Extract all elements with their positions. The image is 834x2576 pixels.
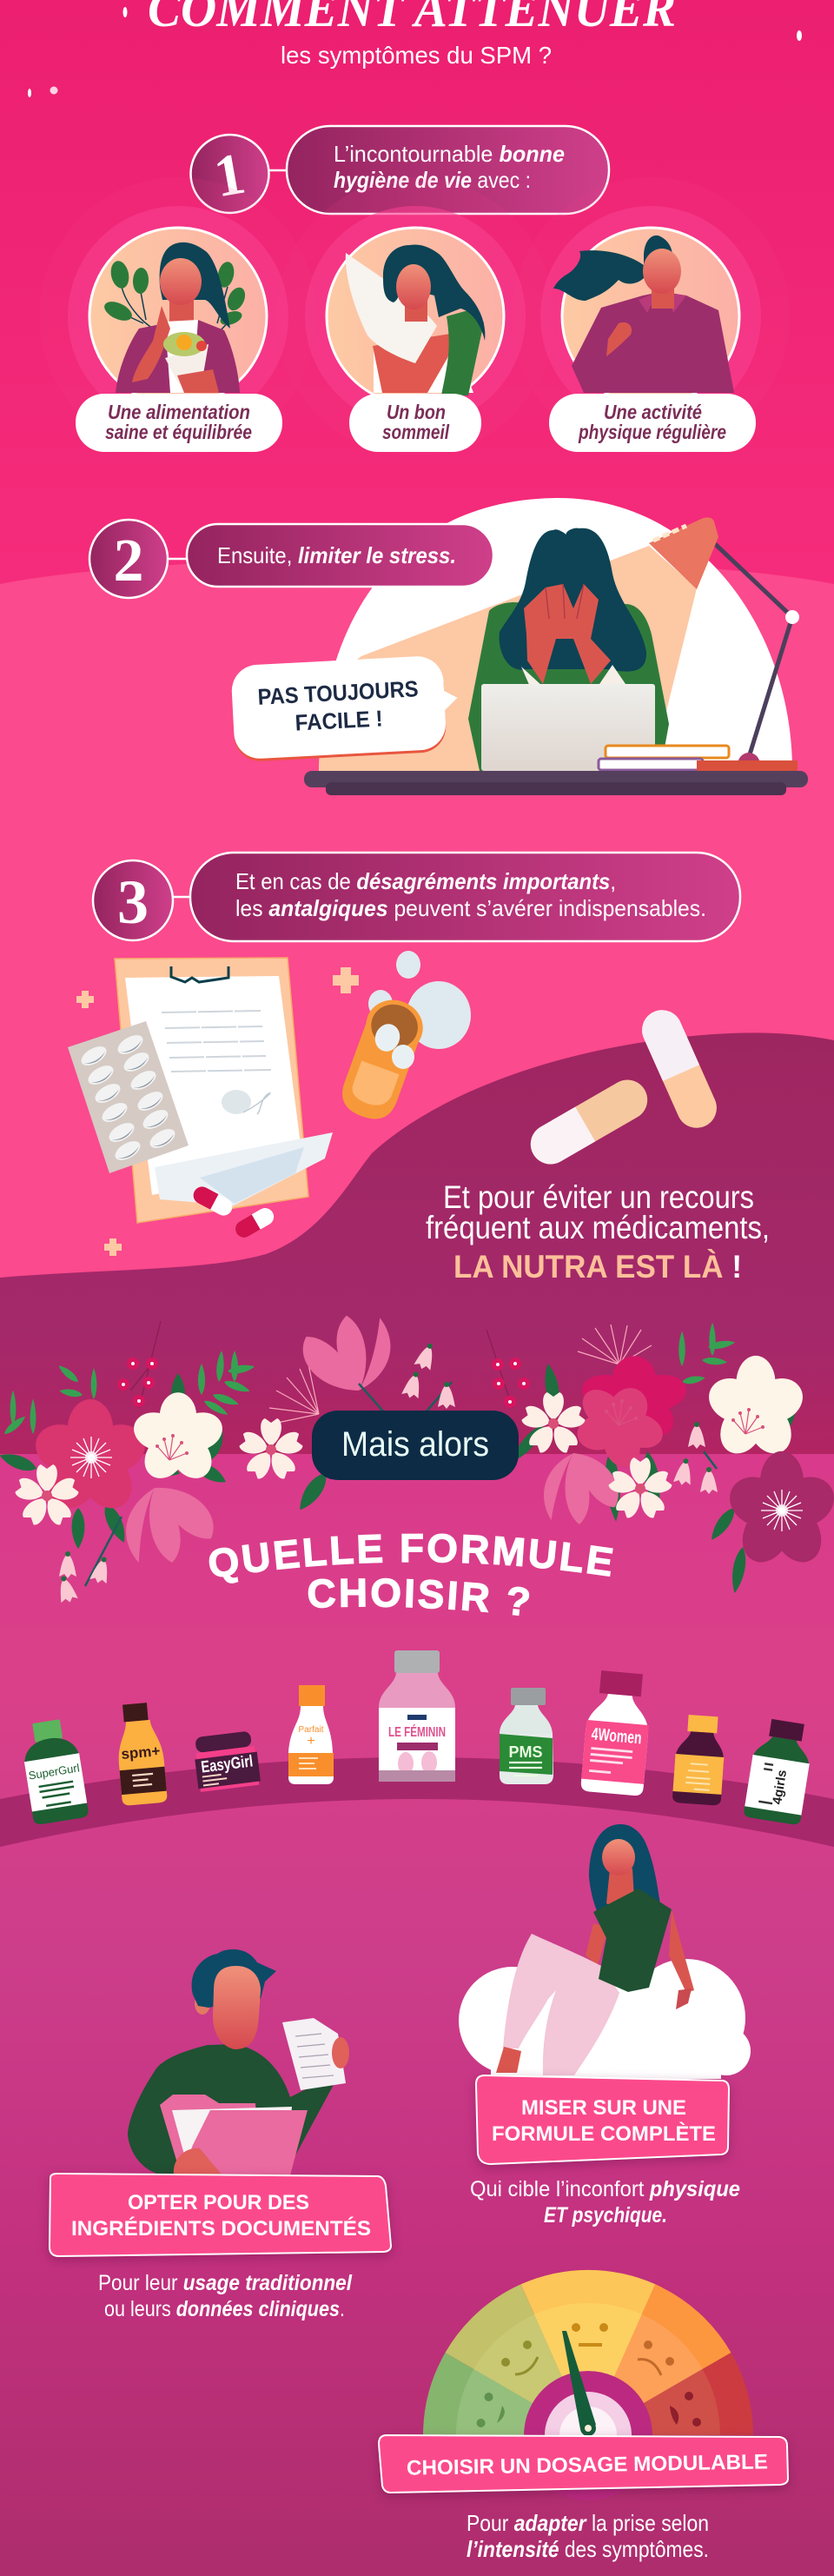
gauge faces xyxy=(477,2323,701,2427)
cream blossom right xyxy=(704,1356,808,1463)
label: sommeil: sommeil xyxy=(382,421,449,443)
panel: good sleep xyxy=(276,177,554,455)
text: adapter la prise xyxy=(467,2510,709,2562)
scene: stressed woman at desk xyxy=(304,498,808,795)
speech bubble: PAS TOUJOURS xyxy=(257,675,419,710)
nutra text xyxy=(426,1179,770,1285)
woman with salad xyxy=(116,242,240,393)
desk xyxy=(304,771,808,795)
speech bubble: FACILE ! xyxy=(295,705,383,736)
nutra text: LA NUTRA EST LÀ ! xyxy=(453,1249,742,1285)
decorative sparkles xyxy=(28,7,802,97)
step 3 label xyxy=(190,853,740,941)
nutra text: Et pour éviter un recours xyxy=(443,1179,754,1215)
bottle: PMS xyxy=(500,1688,553,1784)
needle xyxy=(562,2331,596,2436)
laptop xyxy=(481,684,655,771)
label: activité: Une activité xyxy=(604,401,702,423)
callout: formule complète xyxy=(476,2075,729,2164)
icon: plus signs xyxy=(76,967,359,1256)
callout: ingrédients: INGRÉDIENTS DOCUMENTÉS xyxy=(71,2216,371,2241)
bottle: 4girls: 4girls xyxy=(770,1769,790,1805)
red flower right xyxy=(555,1356,692,1486)
nutra text: fréquent aux médicaments, xyxy=(426,1210,770,1245)
step 1 label: hygiène de vie avec : xyxy=(334,167,531,193)
flower garland xyxy=(0,1312,834,1604)
cream blossom left xyxy=(129,1392,228,1486)
woman with pillow xyxy=(346,245,485,395)
number badge 1: 1 xyxy=(209,140,250,209)
bottle: 4girls xyxy=(743,1717,816,1825)
books xyxy=(599,746,729,770)
heading: quelle formule choisir: CHOISIR ? xyxy=(308,1578,530,1617)
bottle: 4Women xyxy=(580,1670,653,1796)
pink rose left xyxy=(30,1399,151,1518)
step 3 label: Et en cas de désagréments importants, xyxy=(235,868,616,894)
purple flower right xyxy=(724,1451,834,1572)
bottle: Perfect +: Parfait xyxy=(299,1725,324,1735)
text: physique et psychique: ET psychique. xyxy=(544,2203,667,2227)
stems xyxy=(85,1382,717,1586)
bottle: spm+ xyxy=(114,1702,168,1806)
pink folder xyxy=(160,2095,308,2175)
step 2 label xyxy=(187,524,493,587)
blister pack xyxy=(68,1021,189,1173)
mais alors pill: Mais alors xyxy=(341,1425,489,1464)
leaves xyxy=(0,1363,801,1594)
text: usage traditionnel: Pour leur usage traditionnel xyxy=(98,2271,353,2295)
callout: formule complète: MISER SUR UNE xyxy=(521,2096,686,2120)
bottle: SuperGurl: SuperGurl xyxy=(28,1761,81,1783)
step 2 label: Ensuite, limiter le stress. xyxy=(217,542,456,568)
heading: quelle formule choisir: QUELLE FORMULE xyxy=(208,1533,613,1583)
gauge xyxy=(423,2270,753,2500)
callout: dosage modulable xyxy=(379,2435,788,2493)
callout: ingrédients: OPTER POUR DES xyxy=(128,2191,309,2214)
text: physique et psychique: Qui cible l’inconfort physique xyxy=(470,2177,740,2201)
background: lower magenta xyxy=(0,1454,834,2576)
woman running xyxy=(553,236,734,393)
clipboard and prescription xyxy=(115,958,333,1223)
step 1 label: L’incontournable bonne xyxy=(334,141,565,167)
man with documents xyxy=(128,1949,349,2175)
number badge 3 xyxy=(93,860,173,940)
bottle: Perfect +: + xyxy=(307,1734,315,1749)
daisies xyxy=(14,1392,673,1527)
step 1 xyxy=(191,126,609,214)
lamp light beam xyxy=(319,546,697,771)
background: shelf arch xyxy=(0,1757,834,1847)
bottle: Le Féminin xyxy=(379,1650,455,1782)
cloud xyxy=(459,1959,751,2079)
gauge centre xyxy=(545,2392,632,2479)
subtitle: les symptômes du SPM ? xyxy=(281,42,552,69)
bottle: Le Féminin: LE FÉMININ xyxy=(388,1723,446,1740)
step 2 xyxy=(89,520,493,598)
bottle: EasyGirl: EasyGirl xyxy=(200,1752,254,1777)
label: sommeil xyxy=(349,394,481,452)
background: top pink xyxy=(0,0,834,626)
gauge segments xyxy=(423,2270,753,2435)
label: activité xyxy=(549,394,756,452)
berries xyxy=(117,1321,530,1408)
gauge ring xyxy=(523,2370,653,2500)
label: sommeil: Un bon xyxy=(387,401,446,423)
document xyxy=(282,2018,346,2090)
background: purple wave xyxy=(0,1032,834,1455)
label: activité: physique régulière xyxy=(578,421,726,443)
small red capsules xyxy=(190,1184,277,1241)
icon: leaves xyxy=(102,259,248,332)
tablets xyxy=(368,951,471,1049)
number badge 3: 3 xyxy=(117,867,149,937)
tulips xyxy=(120,1312,619,1569)
callout: ingrédients xyxy=(50,2174,391,2256)
large capsule vertical xyxy=(636,1004,723,1134)
speech bubble xyxy=(230,654,460,762)
lamp xyxy=(649,517,799,771)
text: usage traditionnel xyxy=(98,2271,353,2321)
bell flowers xyxy=(55,1341,718,1604)
bottle: 4Women: 4Women xyxy=(591,1724,642,1748)
bottle: spm+: spm+ xyxy=(121,1743,161,1763)
step 3 label: les antalgiques peuvent s’avérer indispensables. xyxy=(235,895,706,921)
woman hair and body xyxy=(468,528,669,771)
pill bottle xyxy=(334,993,430,1126)
white arch xyxy=(319,498,792,771)
woman on cloud xyxy=(496,1824,694,2075)
panel: healthy eating xyxy=(39,177,317,455)
bottle: EasyGirl xyxy=(192,1730,261,1792)
dandelions xyxy=(265,1325,652,1425)
bottle: PMS: PMS xyxy=(508,1743,543,1761)
number badge 2 xyxy=(89,520,168,598)
step 1 label xyxy=(287,126,609,214)
label: alimentation: Une alimentation xyxy=(108,401,250,423)
panel: physical activity xyxy=(512,177,790,455)
bottle: SuperGurl xyxy=(18,1717,89,1825)
callout: dosage modulable: CHOISIR UN DOSAGE MODULABLE xyxy=(407,2450,768,2480)
step 3 xyxy=(93,853,740,941)
callout: formule complète: FORMULE COMPLÈTE xyxy=(492,2121,716,2146)
number badge 1 xyxy=(191,135,269,213)
spray leaves xyxy=(2,1323,736,1437)
mais alors pill xyxy=(312,1411,519,1480)
number badge 2: 2 xyxy=(113,528,144,594)
bottle: yellow xyxy=(672,1714,727,1806)
bottle: Perfect + xyxy=(288,1685,334,1784)
label: alimentation: saine et équilibrée xyxy=(105,421,252,443)
background: second pink wave xyxy=(0,558,834,1304)
large capsule horizontal xyxy=(523,1072,655,1172)
heading: quelle formule choisir xyxy=(208,1533,613,1617)
text: physique et psychique xyxy=(470,2177,740,2227)
text: usage traditionnel: ou leurs données cliniques. xyxy=(104,2297,345,2321)
text: adapter la prise: l’intensité des symptômes. xyxy=(467,2536,709,2562)
label: alimentation xyxy=(76,394,282,452)
text: adapter la prise: Pour adapter la prise selon xyxy=(467,2510,709,2536)
